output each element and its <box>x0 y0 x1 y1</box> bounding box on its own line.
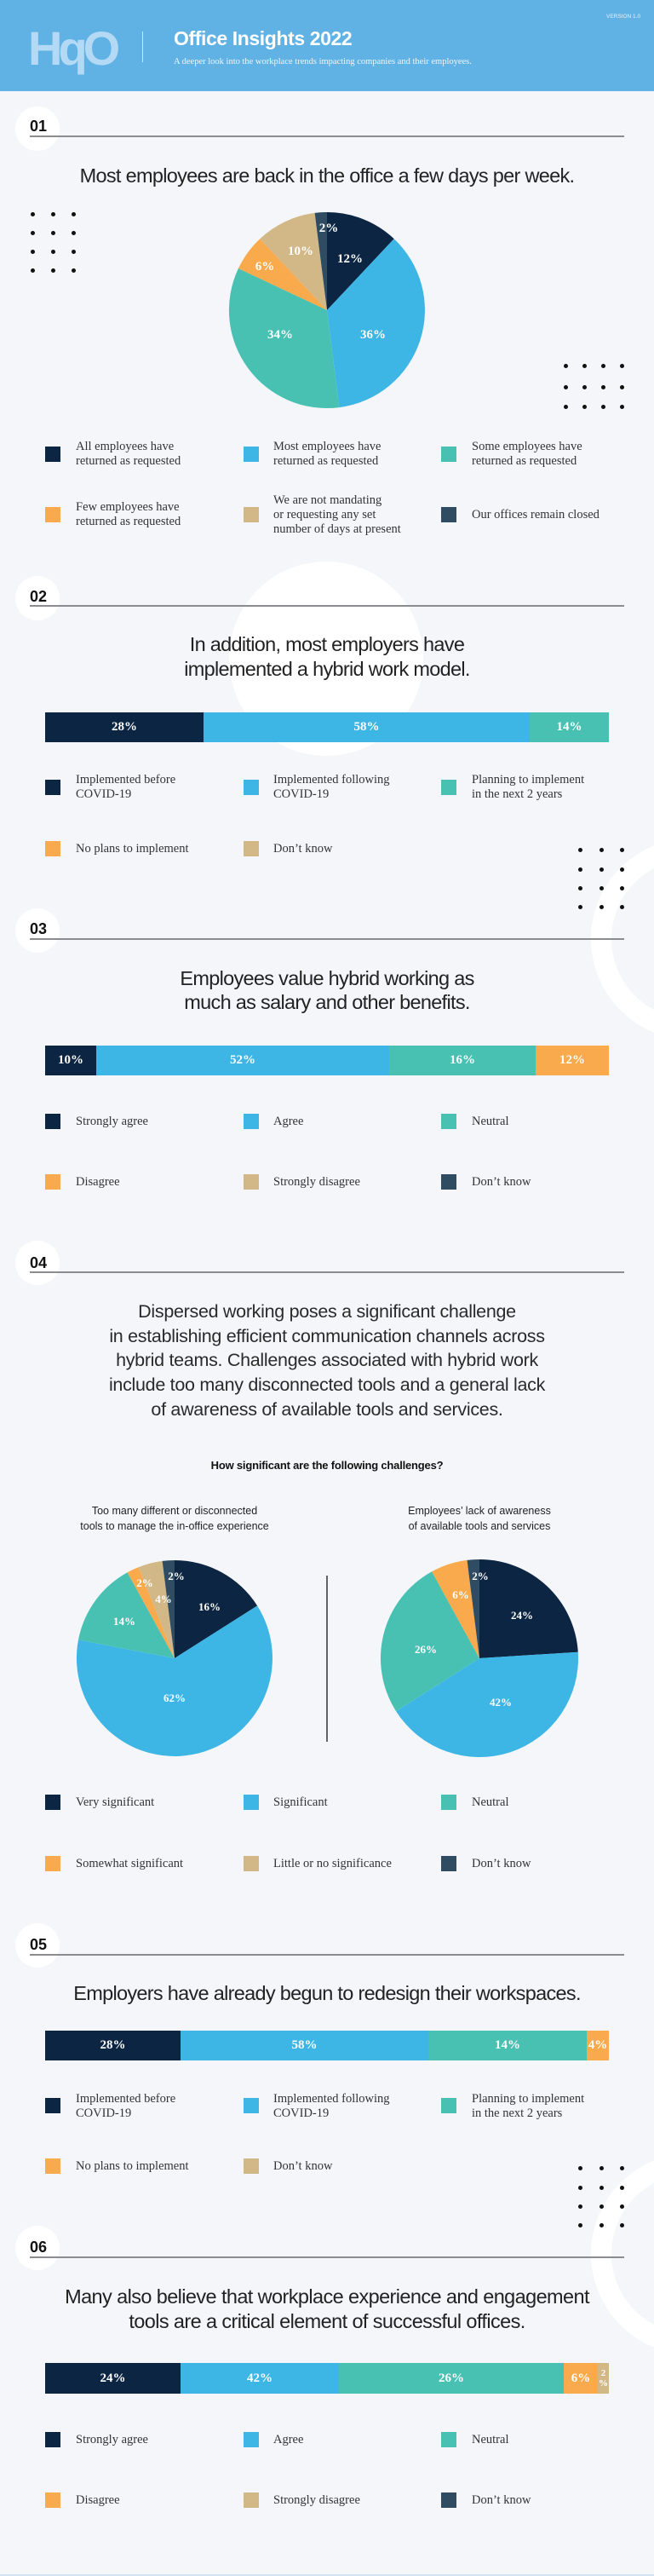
subtitle left pie: tools to manage the in-office experience <box>80 1520 269 1532</box>
heading 06: Many also believe that workplace experience and engagement <box>65 2285 589 2308</box>
text: Few employees have <box>76 500 180 514</box>
text: 02 <box>30 588 47 605</box>
text: in the next 2 years <box>472 2106 562 2120</box>
heading 05: Employers have already begun to redesign their workspaces. <box>73 1982 581 2004</box>
text: Implemented following <box>273 773 390 787</box>
legend 06 <box>45 2432 531 2508</box>
subtitle right pie: of available tools and services <box>409 1520 550 1532</box>
bar chart 05: 14% <box>495 2038 520 2052</box>
dots right <box>564 364 624 409</box>
pie charts 04: 62% <box>164 1691 186 1704</box>
bar chart 05: 58% <box>291 2038 317 2052</box>
chart question: How significant are the following challenges? <box>211 1459 443 1472</box>
text: Disagree <box>76 2493 120 2507</box>
heading 02: implemented a hybrid work model. <box>184 658 470 680</box>
logo: HqO <box>28 21 116 75</box>
heading 04: of awareness of available tools and services. <box>151 1399 503 1420</box>
subtitle left pie: Too many different or disconnected <box>92 1505 257 1517</box>
text: Disagree <box>76 1175 120 1189</box>
bar chart 02: 58% <box>354 720 380 734</box>
text: COVID-19 <box>76 787 131 801</box>
text: Strongly agree <box>76 2433 148 2446</box>
text: Very significant <box>76 1795 154 1809</box>
pie charts 04: 26% <box>415 1643 437 1656</box>
version: VERSION 1.0 <box>606 14 640 20</box>
bar chart 02: 28% <box>112 720 137 734</box>
text: in the next 2 years <box>472 787 562 801</box>
text: No plans to implement <box>76 842 189 856</box>
text: Significant <box>273 1795 328 1809</box>
text: returned as requested <box>472 454 577 468</box>
text: 05 <box>30 1936 47 1953</box>
pie chart 01 <box>228 212 425 408</box>
bar chart 06: 2 <box>601 2368 605 2378</box>
heading 04 <box>109 1301 545 1420</box>
heading 04: include too many disconnected tools and a general lack <box>109 1374 545 1395</box>
pie chart 01: 36% <box>360 328 386 342</box>
dots 02 <box>578 848 624 909</box>
bar chart 06 <box>45 2363 609 2394</box>
pie chart 01: 34% <box>267 328 293 342</box>
heading 03: Employees value hybrid working as <box>180 967 474 989</box>
text: COVID-19 <box>76 2106 131 2120</box>
text: 01 <box>30 118 47 135</box>
text: All employees have <box>76 440 174 453</box>
text: Don’t know <box>472 2493 531 2507</box>
text: number of days at present <box>273 522 401 536</box>
text: returned as requested <box>273 454 378 468</box>
bar chart 02 <box>45 712 609 742</box>
text: returned as requested <box>76 515 181 528</box>
heading 02: In addition, most employers have <box>190 633 464 655</box>
legend 04 <box>45 1795 531 1871</box>
text: Don’t know <box>472 1175 531 1189</box>
text: 06 <box>30 2239 47 2256</box>
bar chart 02: 14% <box>557 720 582 734</box>
text: Most employees have <box>273 440 381 453</box>
bar chart 06: % <box>599 2378 608 2389</box>
pie charts 04: 42% <box>490 1696 512 1709</box>
pie charts 04: 16% <box>198 1600 221 1613</box>
legend 03 <box>45 1114 531 1190</box>
text: Strongly disagree <box>273 2493 360 2507</box>
text: Planning to implement <box>472 773 584 787</box>
text: Little or no significance <box>273 1857 392 1870</box>
heading 04: Dispersed working poses a significant challenge <box>138 1301 516 1322</box>
text: Neutral <box>472 2433 508 2446</box>
pie charts 04: 2% <box>136 1576 153 1589</box>
pie chart 01: 12% <box>337 252 363 266</box>
text: Implemented before <box>76 773 175 787</box>
heading 06 <box>65 2285 589 2331</box>
bar chart 06: 42% <box>247 2371 272 2384</box>
legend 05 <box>45 2092 584 2174</box>
subtitle right pie: Employees’ lack of awareness <box>408 1505 551 1517</box>
text: No plans to implement <box>76 2159 189 2173</box>
pie charts 04: 6% <box>452 1588 469 1601</box>
bar chart 05: 28% <box>100 2038 126 2052</box>
text: 03 <box>30 920 47 937</box>
text: 04 <box>30 1254 47 1271</box>
pie chart 01: 2% <box>319 222 338 235</box>
legend 02 <box>45 773 584 856</box>
text: We are not mandating <box>273 493 382 507</box>
bar chart 03 <box>45 1046 609 1075</box>
text: returned as requested <box>76 454 181 468</box>
bar chart 06: 6% <box>571 2371 590 2384</box>
text: Planning to implement <box>472 2092 584 2106</box>
text: Some employees have <box>472 440 582 453</box>
header <box>0 0 654 91</box>
heading 04: in establishing efficient communication channels across <box>109 1326 545 1346</box>
bar chart 06: 26% <box>439 2371 464 2384</box>
bar chart 05 <box>45 2031 609 2060</box>
heading 06: tools are a critical element of successful offices. <box>129 2309 525 2331</box>
text: Strongly disagree <box>273 1175 360 1189</box>
pie charts 04: 14% <box>113 1615 135 1628</box>
text: Implemented before <box>76 2092 175 2106</box>
section 01 number <box>15 107 60 151</box>
pie charts 04: 2% <box>168 1570 185 1582</box>
bar chart 03: 10% <box>58 1053 83 1067</box>
bar chart 06: 24% <box>100 2371 126 2384</box>
subtitle: A deeper look into the workplace trends impacting companies and their employees. <box>174 57 472 66</box>
heading 03: much as salary and other benefits. <box>184 991 470 1013</box>
pie charts 04 <box>77 1559 579 1757</box>
bar chart 03: 52% <box>230 1053 255 1067</box>
bar chart 03: 12% <box>559 1053 585 1067</box>
text: Somewhat significant <box>76 1857 183 1870</box>
pie charts 04: 2% <box>472 1570 489 1582</box>
subtitle left pie <box>80 1505 269 1532</box>
pie charts 04: 24% <box>511 1609 533 1622</box>
heading 02 <box>184 633 470 680</box>
text: or requesting any set <box>273 508 376 522</box>
text: Strongly agree <box>76 1115 148 1128</box>
heading 03 <box>180 967 474 1013</box>
bar chart 03: 16% <box>450 1053 475 1067</box>
heading 04: hybrid teams. Challenges associated with hybrid work <box>116 1350 538 1370</box>
text: Implemented following <box>273 2092 390 2106</box>
text: Don’t know <box>273 842 332 856</box>
title: Office Insights 2022 <box>174 27 352 49</box>
section 05 number <box>15 1923 60 1968</box>
text: Neutral <box>472 1795 508 1809</box>
section 06 number <box>15 2226 60 2270</box>
section 03 number <box>15 908 60 953</box>
text: COVID-19 <box>273 2106 329 2120</box>
pie chart 01: 10% <box>288 245 313 258</box>
bar chart 05: 4% <box>588 2038 607 2052</box>
dots left <box>31 212 76 273</box>
text: Our offices remain closed <box>472 508 600 522</box>
dots 05 <box>578 2166 624 2227</box>
pie charts 04: 4% <box>155 1593 172 1605</box>
legend 01 <box>45 440 600 536</box>
text: Don’t know <box>273 2159 332 2173</box>
text: COVID-19 <box>273 787 329 801</box>
text: Neutral <box>472 1115 508 1128</box>
subtitle right pie <box>408 1505 551 1532</box>
pie chart 01: 6% <box>255 260 274 274</box>
text: Agree <box>273 1115 303 1128</box>
section 02 number <box>15 576 60 620</box>
section 04 number <box>15 1241 60 1285</box>
text: Don’t know <box>472 1857 531 1870</box>
text: Agree <box>273 2433 303 2446</box>
heading 01: Most employees are back in the office a few days per week. <box>80 164 574 187</box>
